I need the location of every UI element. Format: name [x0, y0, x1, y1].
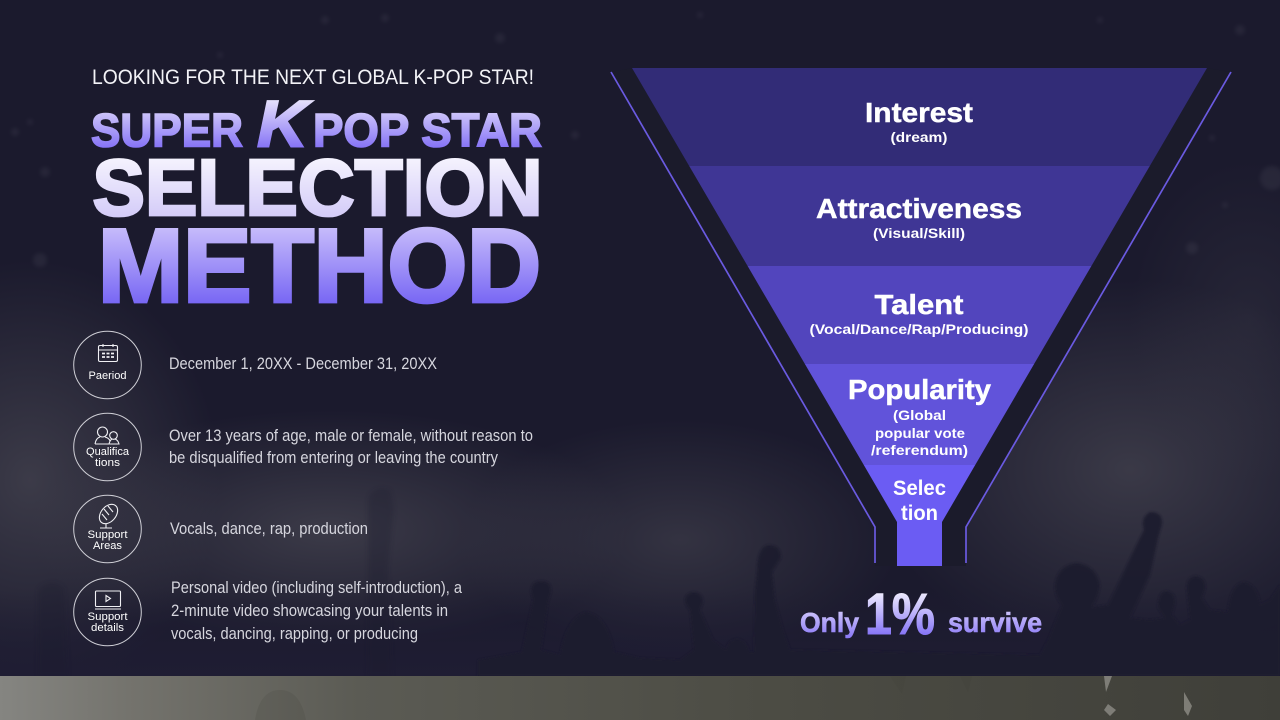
- funnel level: attractiveness: (Visual/Skill): [873, 225, 965, 241]
- funnel: dark surround: [611, 68, 1231, 566]
- title line: Super K Pop Star: K: [257, 86, 313, 160]
- title: [91, 86, 542, 324]
- icon: video player: [95, 591, 121, 609]
- text: qualifications: be disqualified from entering or leaving the country: [169, 449, 499, 467]
- callout: only 1% survive: Only: [800, 607, 859, 638]
- info row: support areas: [74, 495, 368, 563]
- funnel level: popularity: (Global: [893, 407, 946, 423]
- funnel level: popularity: popular vote: [875, 425, 965, 441]
- badge: support areas: Support: [88, 529, 128, 541]
- badge: qualifications: [74, 413, 141, 481]
- funnel level: interest: (dream): [890, 129, 948, 145]
- badge: support areas: [74, 495, 141, 563]
- text: support details: vocals, dancing, rapping, or producing: [171, 625, 418, 643]
- funnel chart: [611, 68, 1231, 566]
- text: support areas: Vocals, dance, rap, production: [170, 520, 368, 538]
- funnel level: talent: [748, 266, 1091, 364]
- funnel level: popularity: Popularity: [848, 374, 991, 405]
- funnel level: selection: Selec: [893, 477, 946, 500]
- text: support details: [171, 579, 463, 643]
- funnel level: interest: [632, 68, 1207, 166]
- icon: calendar: [98, 344, 118, 362]
- background: crowd silhouettes: [38, 489, 1280, 676]
- text: qualifications: Over 13 years of age, male or female, without reason to: [169, 427, 533, 445]
- funnel level: selection: tion: [901, 502, 938, 525]
- text: support details: Personal video (including self-introduction), a: [171, 579, 463, 597]
- info row: support details: [74, 578, 463, 646]
- funnel level: interest: Interest: [865, 97, 973, 128]
- info row: period: [74, 331, 437, 399]
- title line: Selection: SELECTION: [92, 143, 542, 232]
- badge: support areas: Areas: [93, 540, 122, 552]
- funnel level: attractiveness: [689, 166, 1150, 266]
- funnel level: popularity: [805, 364, 1034, 465]
- funnel level: talent: Talent: [874, 289, 964, 320]
- title line: Super K Pop Star: [91, 86, 542, 160]
- badge: support details: details: [91, 622, 125, 634]
- badge: support details: [74, 578, 141, 646]
- icon: microphone: [96, 501, 121, 528]
- funnel level: talent: (Vocal/Dance/Rap/Producing): [810, 321, 1028, 337]
- title line: Super K Pop Star: SUPER: [91, 104, 243, 156]
- title line: Super K Pop Star: POP STAR: [313, 104, 542, 156]
- funnel: outer outline: [611, 72, 1231, 563]
- heading: tagline: LOOKING FOR THE NEXT GLOBAL K-POP STAR!: [92, 65, 534, 89]
- icon: people: [95, 427, 119, 444]
- info row: qualifications: [74, 413, 533, 481]
- badge: qualifications: tions: [95, 457, 121, 469]
- callout: only 1% survive: 1%: [865, 582, 935, 647]
- callout: only 1% survive: survive: [948, 607, 1042, 638]
- badge: period: Paeriod: [88, 370, 126, 382]
- funnel level: selection: [864, 465, 975, 566]
- text: period: December 1, 20XX - December 31, 20XX: [169, 355, 437, 373]
- title line: Method: METHOD: [98, 208, 541, 324]
- badge: qualifications: Qualifica: [86, 446, 130, 458]
- text: support details: 2-minute video showcasing your talents in: [171, 602, 448, 620]
- text: qualifications: [169, 427, 533, 467]
- callout: only 1% survive: [800, 582, 1042, 647]
- badge: period: [74, 331, 141, 399]
- badge: support details: Support: [88, 611, 128, 623]
- bottom band: [0, 676, 1280, 720]
- funnel level: attractiveness: Attractiveness: [816, 193, 1022, 224]
- funnel level: popularity: /referendum): [871, 442, 968, 458]
